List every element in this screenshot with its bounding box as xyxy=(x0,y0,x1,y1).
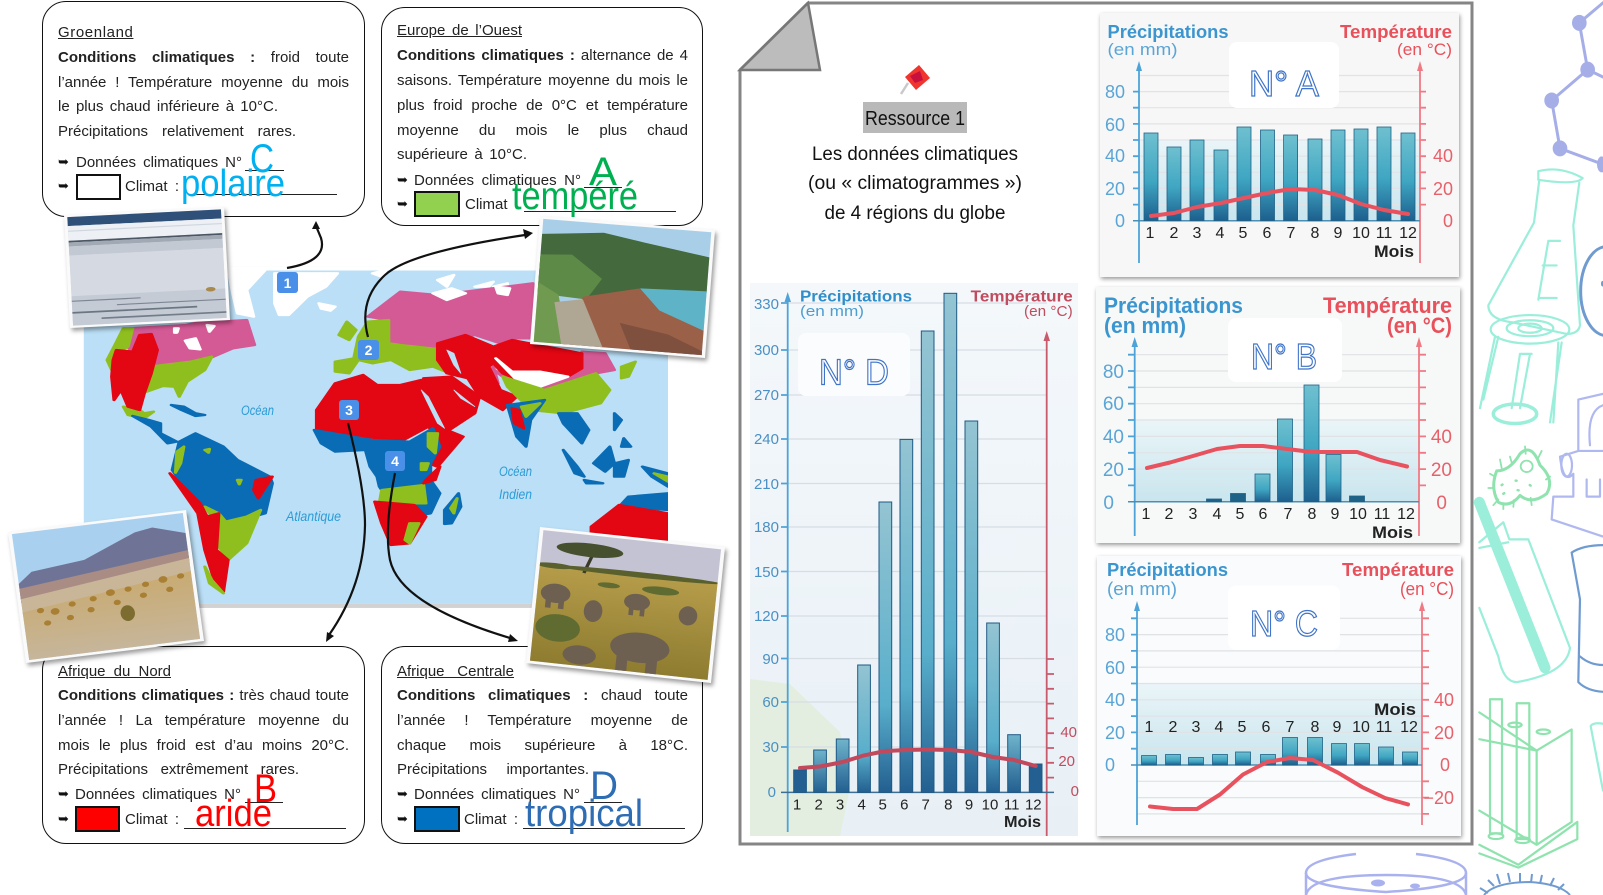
ocean labels xyxy=(241,402,532,524)
tropical africa xyxy=(314,428,440,515)
axis titles: (en °C) xyxy=(1400,579,1454,599)
axis titles xyxy=(800,288,1073,320)
axis titles: Température xyxy=(971,288,1073,305)
months: 11 xyxy=(1374,506,1390,523)
temperature scale: 40 xyxy=(1433,146,1453,166)
months: 10 xyxy=(1352,719,1370,736)
icon: cone flask edge xyxy=(1591,723,1603,791)
axis titles xyxy=(1104,293,1452,338)
map badge 1: 1 xyxy=(284,275,292,291)
axis titles: (en °C) xyxy=(1397,40,1452,59)
legend square: tropical xyxy=(414,806,460,832)
answer: D tropical: D xyxy=(590,764,618,808)
precipitation scale: 80 xyxy=(1105,82,1125,102)
panel: Afrique Centrale xyxy=(381,646,703,844)
precipitation scale xyxy=(754,296,779,801)
months: 7 xyxy=(1287,225,1296,242)
icon: beaker xyxy=(1572,545,1603,692)
months: 12 xyxy=(1399,225,1417,242)
months: 3 xyxy=(1189,506,1198,523)
panel: Europe de l'Ouest: Données climatiques N° xyxy=(414,172,581,189)
months: 2 xyxy=(815,796,823,813)
months: 4 xyxy=(1215,719,1224,736)
months: 9 xyxy=(1333,719,1342,736)
precipitation scale: 0 xyxy=(1115,211,1125,231)
text block: resource description xyxy=(808,144,1022,224)
temperature line xyxy=(800,750,1036,768)
polar regions xyxy=(227,266,536,318)
ocean labels: Océan xyxy=(499,463,532,479)
months: 12 xyxy=(1025,796,1042,813)
arrow: Europe de l'Ouest xyxy=(365,229,533,337)
sahara xyxy=(317,375,463,467)
white label patch xyxy=(798,333,910,396)
text block: resource description: de 4 régions du globe xyxy=(824,203,1006,224)
months: 11 xyxy=(1376,225,1392,242)
panel: Afrique du Nord: l’année ! La température moyenne du xyxy=(58,712,349,729)
precipitation scale: 0 xyxy=(1105,755,1115,775)
ocean labels: Indien xyxy=(499,486,532,502)
months: Mois xyxy=(1004,814,1041,831)
precipitation scale xyxy=(1103,362,1124,514)
panel: Afrique du Nord: ➥ xyxy=(58,787,69,802)
months: 8 xyxy=(1311,225,1320,242)
arrow: Groenland xyxy=(287,221,322,268)
panel: Groenland: l’année ! Température moyenne du mois xyxy=(58,74,349,91)
months: 1 xyxy=(1145,719,1154,736)
months: 2 xyxy=(1170,225,1179,242)
text block: resource description: Les données climatiques xyxy=(812,144,1018,165)
heading: Groenland: Groenland xyxy=(58,24,133,41)
months: 6 xyxy=(1262,719,1271,736)
precipitation scale: 0 xyxy=(1103,493,1114,514)
arrow: Afrique Centrale xyxy=(388,473,518,642)
months: 3 xyxy=(1192,719,1201,736)
india and south east asia xyxy=(507,400,668,510)
panel: Europe de l'Ouest: moyenne du mois le plus chaud xyxy=(397,122,688,139)
temperature scale: 20 xyxy=(1431,460,1452,481)
panel: Afrique Centrale: Données climatiques N° xyxy=(414,786,580,803)
icon: petri dish bottom xyxy=(1306,854,1466,895)
temperature line xyxy=(1151,189,1408,216)
months: 1 xyxy=(1142,506,1151,523)
icon: petri dish xyxy=(1581,247,1603,336)
months: 9 xyxy=(965,796,973,813)
text block: resource description: (ou « climatogrammes ») xyxy=(808,173,1022,194)
text block: conditions: Conditions climatiques : chaud toute xyxy=(397,687,688,704)
australia xyxy=(591,505,668,542)
months: 3 xyxy=(836,796,844,813)
map badge 3 xyxy=(339,400,359,420)
panel: Afrique Centrale: ➥ xyxy=(397,812,408,827)
asia pink xyxy=(484,352,614,390)
panel: Groenland: ➥ xyxy=(58,179,69,194)
months: 2 xyxy=(1169,719,1178,736)
icon: pipette bottle xyxy=(1479,502,1570,682)
south america xyxy=(172,433,272,520)
legend square: aride xyxy=(75,806,120,832)
world climate map xyxy=(84,267,668,608)
precipitation scale xyxy=(1105,625,1125,775)
heading: Ressource 1 xyxy=(863,102,967,133)
precipitation scale: 300 xyxy=(754,342,779,359)
map badge 1 xyxy=(277,272,298,293)
temperature scale: 20 xyxy=(1058,753,1075,770)
icon: microscope xyxy=(1552,394,1603,537)
precipitation scale: 150 xyxy=(754,564,779,581)
chart: climatogramme C xyxy=(1097,556,1461,836)
precipitation scale: 40 xyxy=(1105,146,1125,166)
months: 8 xyxy=(944,796,952,813)
months: 1 xyxy=(1146,225,1155,242)
months: 5 xyxy=(879,796,887,813)
white label patch xyxy=(1228,586,1340,650)
answer: A tempéré: tempéré xyxy=(512,175,638,218)
precipitation scale: 30 xyxy=(762,739,779,756)
months: 12 xyxy=(1400,719,1418,736)
map badge 4 xyxy=(385,451,405,471)
precipitation scale xyxy=(1105,82,1125,231)
photo: Afrique du Nord xyxy=(8,510,204,663)
months: 4 xyxy=(1216,225,1225,242)
months: 7 xyxy=(1286,719,1295,736)
bars xyxy=(1206,385,1364,502)
months: Mois xyxy=(1372,523,1413,542)
precipitation scale: 60 xyxy=(762,694,779,711)
panel: Europe de l'Ouest: ➥ xyxy=(397,197,408,212)
answer: C polaire xyxy=(181,137,285,205)
temperature scale: 0 xyxy=(1443,211,1453,231)
precipitation scale: 80 xyxy=(1103,362,1124,383)
temperate north america pink xyxy=(125,320,255,366)
axis titles: (en mm) xyxy=(1104,313,1186,338)
precipitation scale: 90 xyxy=(762,651,779,668)
months: 6 xyxy=(1263,225,1272,242)
bars xyxy=(1142,738,1418,765)
map badge 2 xyxy=(358,340,379,360)
precipitation scale: 0 xyxy=(768,784,776,801)
answer: C polaire: C xyxy=(250,137,274,181)
icon: molecule xyxy=(1544,3,1603,172)
china green xyxy=(503,362,635,413)
months: 12 xyxy=(1397,506,1415,523)
icon: flask on burner xyxy=(1480,169,1583,424)
temperature scale: 0 xyxy=(1071,783,1079,800)
axis titles: (en mm) xyxy=(1107,579,1177,599)
months: 10 xyxy=(1349,506,1367,523)
panel: Afrique du Nord: Données climatiques N° xyxy=(75,786,241,803)
axis titles: Précipitations xyxy=(1104,293,1243,318)
europe green xyxy=(335,320,454,375)
months: 8 xyxy=(1311,719,1320,736)
months: Mois xyxy=(1374,700,1416,719)
temperature scale: 0 xyxy=(1440,755,1450,775)
panel: Europe de l'Ouest: Climat xyxy=(465,196,508,213)
map badge 2: 2 xyxy=(365,342,373,358)
months xyxy=(1142,506,1415,542)
text block: conditions: Conditions climatiques : très chaud toute xyxy=(58,687,349,704)
precipitation scale: 80 xyxy=(1105,625,1125,645)
precipitation scale: 270 xyxy=(754,387,779,404)
panel: Afrique Centrale: ➥ xyxy=(397,787,408,802)
white label patch: N° B xyxy=(1251,336,1317,377)
axis titles: Température xyxy=(1340,22,1452,42)
answer: A tempéré: A xyxy=(589,150,617,194)
panel: Afrique du Nord: ➥ xyxy=(58,812,69,827)
white label patch: N° C xyxy=(1250,603,1318,644)
months: 11 xyxy=(1376,719,1392,736)
precipitation scale: 120 xyxy=(754,608,779,625)
heading: Europe de l'Ouest: Europe de l’Ouest xyxy=(397,22,522,39)
eurasia pink xyxy=(368,283,533,347)
temperature scale xyxy=(1058,724,1079,800)
months: Mois xyxy=(1374,242,1414,261)
months: 7 xyxy=(1284,506,1293,523)
legend square: polaire xyxy=(76,174,121,200)
ocean labels: Atlantique xyxy=(285,508,341,524)
panel: ressource frame xyxy=(740,3,1472,844)
icon: test tube rack xyxy=(1479,699,1577,868)
precipitation scale: 60 xyxy=(1103,394,1124,415)
answer: D tropical xyxy=(525,764,643,835)
chart: climatogramme D xyxy=(750,283,1079,836)
temperature scale xyxy=(1433,146,1453,231)
map badge 4: 4 xyxy=(391,453,399,469)
chart: climatogramme B xyxy=(1096,287,1460,543)
months: 5 xyxy=(1238,719,1247,736)
panel: Europe de l'Ouest: ➥ xyxy=(397,173,408,188)
axis titles: (en mm) xyxy=(1108,40,1178,59)
bars xyxy=(1144,127,1415,221)
precipitation scale: 20 xyxy=(1105,723,1125,743)
months xyxy=(1146,225,1417,261)
temperature scale: 40 xyxy=(1434,690,1454,710)
temperature line xyxy=(1147,446,1407,468)
axes xyxy=(1133,61,1426,263)
precipitation scale: 180 xyxy=(754,519,779,536)
precipitation scale: 60 xyxy=(1105,115,1125,135)
white label patch: N° D xyxy=(819,352,889,393)
icon: pushpin xyxy=(901,65,930,94)
heading: Ressource 1: Ressource 1 xyxy=(865,108,965,130)
photo: Afrique Centrale xyxy=(526,527,725,683)
panel: Afrique Centrale: Climat : xyxy=(464,811,518,828)
axis titles xyxy=(1107,560,1454,599)
months: 8 xyxy=(1308,506,1317,523)
answer: C polaire: polaire xyxy=(181,163,285,205)
panel: Europe de l'Ouest: plus froid proche de 0°C et température xyxy=(397,97,688,114)
months: 5 xyxy=(1239,225,1248,242)
months: 10 xyxy=(1352,225,1370,242)
panel: Afrique du Nord: Précipitations extrêmement rares. xyxy=(58,761,299,778)
panel: Europe de l'Ouest: supérieure à 10°C. xyxy=(397,146,527,163)
precipitation scale: 330 xyxy=(754,296,779,313)
answer: D tropical: tropical xyxy=(525,793,643,835)
panel: Afrique du Nord xyxy=(42,646,365,844)
ocean labels: Océan xyxy=(241,402,274,418)
white label patch xyxy=(1228,318,1342,382)
answer: B aride: aride xyxy=(195,793,272,835)
axis titles: Précipitations xyxy=(1107,560,1228,580)
precipitation scale: 20 xyxy=(1105,179,1125,199)
panel: Afrique Centrale: chaque mois supérieure à 18°C. xyxy=(397,737,688,754)
months: 3 xyxy=(1193,225,1202,242)
months: 1 xyxy=(793,796,801,813)
precipitation scale: 20 xyxy=(1103,460,1124,481)
months: 7 xyxy=(922,796,930,813)
white label patch xyxy=(1229,42,1339,108)
panel: Afrique Centrale: Précipitations importantes. xyxy=(397,761,589,778)
central asia red xyxy=(438,335,582,410)
temperature scale: 20 xyxy=(1434,723,1454,743)
axis titles: Température xyxy=(1323,293,1452,318)
months: 5 xyxy=(1236,506,1245,523)
answer: B aride xyxy=(195,767,277,835)
panel: Afrique Centrale: l’année ! Température moyenne de xyxy=(397,712,688,729)
axes xyxy=(1128,337,1426,536)
months: 9 xyxy=(1331,506,1340,523)
arrow: Afrique du Nord xyxy=(326,423,365,642)
white label patch: N° A xyxy=(1249,63,1319,104)
precipitation scale: 240 xyxy=(754,431,779,448)
panel: Groenland: le plus chaud inférieure à 10°C. xyxy=(58,98,278,115)
photo: Groenland xyxy=(64,207,230,328)
precipitation scale: 40 xyxy=(1103,427,1124,448)
temperature scale: 20 xyxy=(1433,179,1453,199)
axis titles: Précipitations xyxy=(1108,22,1228,42)
temperature scale xyxy=(1431,427,1452,514)
temperature scale: 40 xyxy=(1060,724,1077,741)
green north america xyxy=(107,328,212,418)
precipitation scale: 60 xyxy=(1105,658,1125,678)
photo: Europe de l'Ouest xyxy=(530,216,715,358)
red north america xyxy=(112,334,157,410)
text block: conditions: Conditions climatiques : alternance de 4 xyxy=(397,47,688,64)
chart: climatogramme A xyxy=(1100,13,1459,277)
answer: B aride: B xyxy=(254,767,277,811)
axis titles xyxy=(1108,22,1452,59)
months: 4 xyxy=(1213,506,1222,523)
months: 10 xyxy=(982,796,998,813)
temperature scale: −20 xyxy=(1423,788,1454,808)
panel: Groenland: ➥ xyxy=(58,155,69,170)
temperature scale: 0 xyxy=(1436,493,1447,514)
panel: Europe de l'Ouest xyxy=(381,7,703,226)
answer: A tempéré xyxy=(512,150,638,218)
months: 11 xyxy=(1004,796,1019,813)
axis titles: (en °C) xyxy=(1387,313,1452,338)
months: 6 xyxy=(1259,506,1268,523)
panel: Groenland xyxy=(42,1,365,217)
panel: Europe de l'Ouest: saisons. Température moyenne du mois le xyxy=(397,72,688,89)
icon: amoeba xyxy=(1488,446,1550,509)
bars xyxy=(794,293,1042,792)
panel: Groenland: Données climatiques N° xyxy=(76,154,242,171)
axes xyxy=(781,292,1054,836)
panel: Afrique du Nord: mois le plus froid est d’au moins 20°C. xyxy=(58,737,349,754)
panel: Groenland: Précipitations relativement rares. xyxy=(58,123,296,140)
axes xyxy=(1131,601,1429,825)
blue central america xyxy=(133,405,205,443)
map badge 3: 3 xyxy=(345,402,353,418)
icon: germ bottom xyxy=(1480,873,1570,895)
axis titles: (en °C) xyxy=(1024,303,1073,320)
months xyxy=(793,796,1042,831)
months: 2 xyxy=(1165,506,1174,523)
months: 4 xyxy=(858,796,866,813)
temperature line xyxy=(1150,758,1408,809)
heading: Afrique du Nord: Afrique du Nord xyxy=(58,663,171,680)
axis titles: Température xyxy=(1342,560,1454,580)
axis titles: (en mm) xyxy=(800,303,864,320)
precipitation scale: 210 xyxy=(754,476,779,493)
panel: Afrique du Nord: Climat : xyxy=(125,811,179,828)
text block: conditions: Conditions climatiques : froid toute xyxy=(58,49,349,66)
panel: Groenland: Climat : xyxy=(125,178,179,195)
folded corner xyxy=(740,3,820,70)
precipitation scale: 40 xyxy=(1105,690,1125,710)
temperature scale: 40 xyxy=(1431,427,1452,448)
months xyxy=(1145,700,1418,736)
legend square: tempéré xyxy=(414,191,460,217)
middle east xyxy=(424,377,479,432)
axis titles: Précipitations xyxy=(800,288,912,305)
temperature scale xyxy=(1423,690,1454,808)
months: 9 xyxy=(1334,225,1343,242)
months: 6 xyxy=(900,796,908,813)
heading: Afrique Centrale: Afrique Centrale xyxy=(397,663,514,680)
